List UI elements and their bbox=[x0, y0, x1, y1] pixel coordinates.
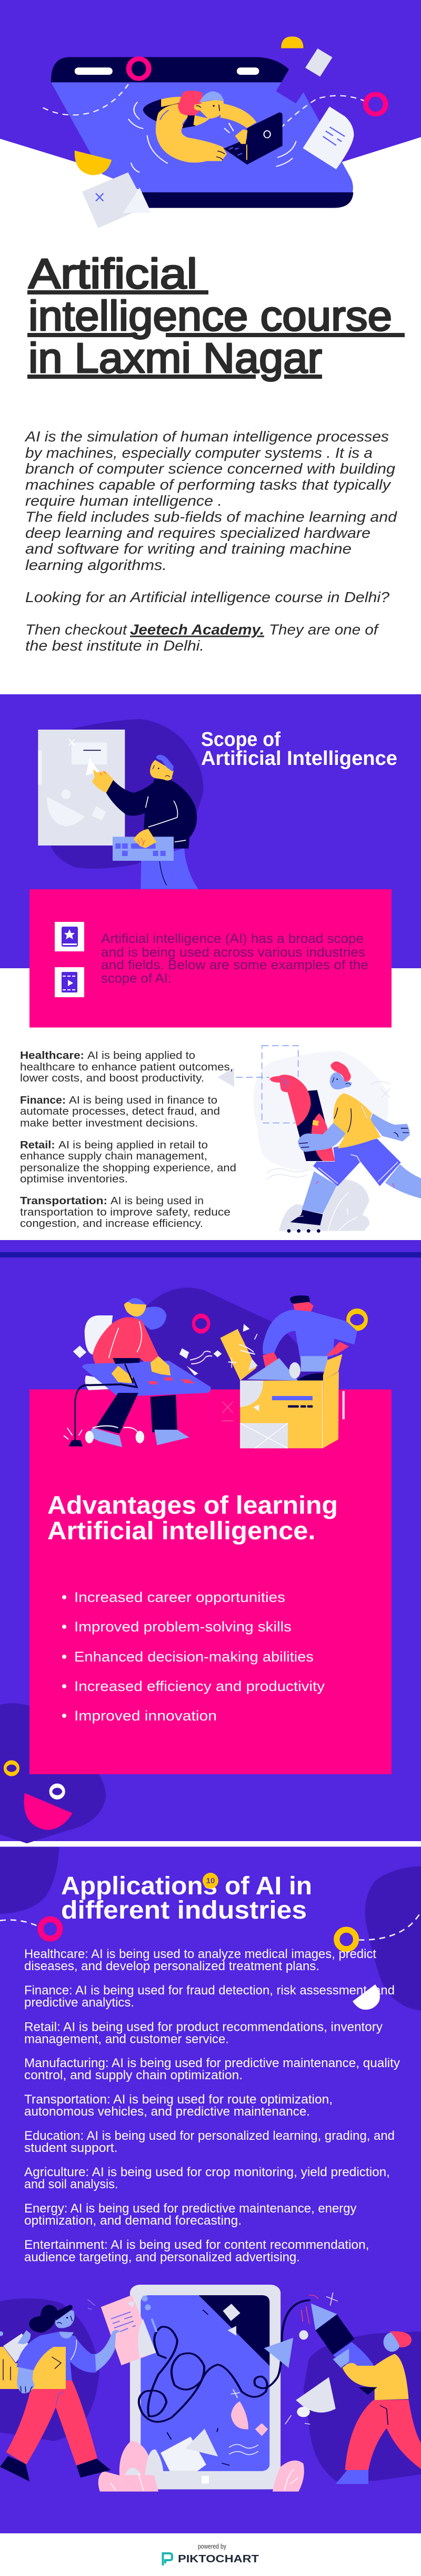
scope intro text: and is being used across various industries bbox=[101, 945, 365, 960]
applications list: diseases, and develop personalized treatment plans. bbox=[24, 1959, 319, 1973]
scope heading: Scope of bbox=[201, 729, 280, 751]
scope examples list: Finance: bbox=[20, 1094, 66, 1106]
scope examples list: AI is being applied to bbox=[87, 1049, 195, 1061]
lower-left shapes bbox=[5, 1763, 73, 1830]
runner figure bbox=[270, 1061, 421, 1233]
scope examples list: enhance supply chain management, bbox=[20, 1150, 207, 1162]
title: in Laxmi Nagar bbox=[28, 335, 322, 381]
scope illustration: man at screen bbox=[38, 719, 204, 889]
advantages heading: Advantages of learning bbox=[47, 1492, 338, 1519]
man figure bbox=[92, 755, 198, 889]
applications list: student support. bbox=[24, 2141, 118, 2155]
scope examples list: make better investment decisions. bbox=[20, 1117, 198, 1129]
panel: applications background bbox=[0, 1847, 421, 2533]
advantages bullet list bbox=[62, 1589, 325, 1724]
applications list: optimization, and demand forecasting. bbox=[24, 2214, 242, 2228]
applications list: Healthcare: AI is being used to analyze medical images, predict bbox=[24, 1947, 376, 1961]
advantages bullet list: Improved problem-solving skills bbox=[74, 1619, 292, 1635]
man with box bbox=[220, 1295, 357, 1448]
scope examples list: AI is being used in bbox=[111, 1195, 204, 1207]
pink paper sheet bbox=[101, 2295, 157, 2365]
panel: advantages background bbox=[0, 1240, 421, 1841]
scope examples list: automate processes, detect fraud, and bbox=[20, 1105, 220, 1117]
bottom illustration: backdrop and tablet bbox=[0, 2285, 421, 2492]
yellow folder bbox=[0, 2347, 66, 2389]
title: Artificial bbox=[28, 250, 197, 297]
scope examples list: lower costs, and boost productivity. bbox=[20, 1072, 204, 1084]
scope examples list: AI is being used in finance to bbox=[69, 1094, 217, 1106]
intro paragraph: branch of computer science concerned with building bbox=[25, 460, 395, 477]
scope examples list: Transportation: bbox=[20, 1195, 107, 1207]
advantages bullet list: Enhanced decision-making abilities bbox=[74, 1649, 314, 1665]
seated woman bbox=[64, 1298, 211, 1447]
applications list: Agriculture: AI is being used for crop monitoring, yield prediction, bbox=[24, 2165, 390, 2179]
title: intelligence course bbox=[28, 292, 392, 339]
icon: Piktochart logo bbox=[163, 2553, 172, 2565]
footer: powered by Piktochart bbox=[163, 2542, 259, 2565]
hero purple background bbox=[0, 0, 421, 203]
intro paragraph: AI is the simulation of human intelligence processes bbox=[24, 428, 389, 445]
advantages heading bbox=[47, 1492, 338, 1545]
applications list: Education: AI is being used for personalized learning, grading, and bbox=[24, 2129, 395, 2143]
panel: scope intro pink box bbox=[29, 889, 392, 1027]
advantages bullet list: Improved innovation bbox=[74, 1708, 217, 1724]
applications list: predictive analytics. bbox=[24, 1995, 134, 2010]
intro paragraph: Jeetech Academy. bbox=[130, 622, 264, 638]
intro paragraph: by machines, especially computer systems . It is a bbox=[25, 445, 373, 461]
scope examples list: AI is being applied in retail to bbox=[58, 1139, 208, 1151]
intro paragraph: deep learning and requires specialized hardware bbox=[25, 525, 370, 541]
woman with paper bbox=[0, 2295, 157, 2465]
scope intro text: scope of AI: bbox=[101, 971, 172, 986]
woman's shoes bbox=[0, 2456, 111, 2481]
open cardboard box bbox=[240, 1354, 343, 1448]
icon: film play bbox=[55, 967, 84, 997]
intro paragraph: the best institute in Delhi. bbox=[25, 637, 204, 654]
intro paragraph: Then checkout bbox=[25, 622, 127, 638]
scope examples list: personalize the shopping experience, and bbox=[20, 1162, 236, 1174]
advantages heading: Artificial intelligence. bbox=[47, 1517, 316, 1545]
intro paragraph bbox=[24, 428, 398, 654]
badge: 10 bbox=[203, 1873, 218, 1889]
scope examples list: Retail: bbox=[20, 1139, 55, 1151]
badge: 10: 10 bbox=[206, 1876, 215, 1885]
scope examples list: congestion, and increase efficiency. bbox=[20, 1217, 203, 1230]
scope intro text bbox=[101, 931, 368, 986]
applications heading bbox=[61, 1872, 312, 1924]
scope examples list: optimise inventories. bbox=[20, 1173, 128, 1185]
title bbox=[27, 250, 405, 381]
applications list: management, and customer service. bbox=[24, 2032, 229, 2046]
applications list: audience targeting, and personalized advertising. bbox=[24, 2250, 300, 2264]
tablet device bbox=[130, 2285, 280, 2490]
keyboard bbox=[113, 837, 174, 861]
intro paragraph: and software for writing and training machine bbox=[25, 540, 352, 557]
applications list: and soil analysis. bbox=[24, 2177, 118, 2191]
blue triangle bbox=[264, 2338, 293, 2368]
decorative rings and dashed paths bbox=[43, 59, 386, 128]
applications list: Manufacturing: AI is being used for predictive maintenance, quality bbox=[24, 2056, 400, 2070]
scope examples list: Healthcare: bbox=[20, 1049, 84, 1061]
applications decorative shapes bbox=[0, 1847, 421, 2011]
advantages bullet list: Increased career opportunities bbox=[74, 1589, 285, 1605]
scope examples list: healthcare to enhance patient outcomes, bbox=[20, 1061, 233, 1073]
scope examples list bbox=[20, 1049, 236, 1230]
intro paragraph: machines capable of performing tasks that typically bbox=[25, 476, 392, 493]
intro paragraph: learning algorithms. bbox=[25, 557, 167, 573]
figure on a laptop bbox=[128, 91, 296, 172]
panel: scope of AI background bbox=[0, 694, 421, 968]
scope heading bbox=[201, 729, 397, 770]
browser window panel bbox=[51, 57, 353, 208]
white half circle accent bbox=[353, 1984, 380, 2010]
scope examples list: transportation to improve safety, reduce bbox=[20, 1206, 230, 1218]
floating shapes bbox=[75, 36, 354, 228]
intro paragraph: require human intelligence . bbox=[25, 493, 222, 509]
footer: powered by Piktochart: PIKTOCHART bbox=[178, 2553, 259, 2565]
footer: powered by Piktochart: powered by bbox=[198, 2542, 226, 2550]
intro paragraph: They are one of bbox=[269, 622, 379, 638]
applications list bbox=[24, 1947, 400, 2264]
person with giant pen bbox=[285, 2293, 421, 2484]
runner illustration bbox=[217, 1046, 421, 1233]
backdrop blobs bbox=[0, 2298, 421, 2481]
applications list: Transportation: AI is being used for route optimization, bbox=[24, 2092, 333, 2107]
advantages backdrop blobs bbox=[0, 1287, 344, 1843]
scope intro text: and fields. Below are some examples of the bbox=[101, 958, 368, 972]
dashed target box bbox=[236, 1046, 298, 1123]
decorative shapes bbox=[73, 1311, 366, 1421]
intro paragraph: The field includes sub-fields of machine learning and bbox=[25, 509, 398, 525]
applications list: control, and supply chain optimization. bbox=[24, 2068, 243, 2082]
applications list: autonomous vehicles, and predictive maintenance. bbox=[24, 2105, 310, 2119]
icon: star book bbox=[55, 922, 84, 951]
advantages illustration bbox=[5, 1295, 366, 1830]
scope intro text: Artificial intelligence (AI) has a broad scope bbox=[101, 931, 364, 946]
applications list: Finance: AI is being used for fraud detection, risk assessment, and bbox=[24, 1983, 395, 1998]
applications list: Energy: AI is being used for predictive maintenance, energy bbox=[24, 2201, 357, 2216]
applications heading: Applications of AI in bbox=[61, 1872, 312, 1900]
hero illustration bbox=[0, 0, 421, 228]
applications list: Retail: AI is being used for product recommendations, inventory bbox=[24, 2020, 383, 2034]
advantages bullet list: Increased efficiency and productivity bbox=[74, 1678, 325, 1694]
plants bbox=[98, 2441, 304, 2492]
applications heading: different industries bbox=[61, 1896, 307, 1924]
scope heading: Artificial Intelligence bbox=[201, 748, 397, 770]
intro paragraph: Looking for an Artificial intelligence course in Delhi? bbox=[25, 589, 389, 605]
scribble line bbox=[139, 2300, 310, 2422]
panel: advantages pink box bbox=[29, 1390, 392, 1774]
grey screen board bbox=[38, 730, 125, 845]
applications list: Entertainment: AI is being used for content recommendation, bbox=[24, 2238, 369, 2252]
